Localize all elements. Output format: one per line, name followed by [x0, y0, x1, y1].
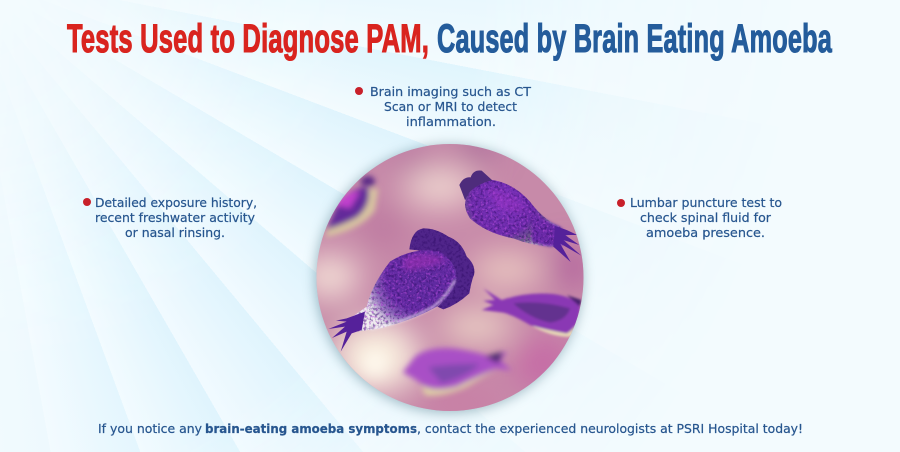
blurred amoeba right: [482, 288, 582, 337]
text block: lumbar puncture: check spinal fluid for: [640, 210, 772, 225]
circular amoeba image: [316, 144, 584, 411]
bullet: [83, 198, 91, 206]
text block: exposure history: or nasal rinsing.: [125, 225, 225, 240]
sharp amoeba centre: [328, 228, 474, 352]
text block: brain imaging: inflammation.: [406, 114, 496, 129]
title: Tests Used to Diagnose PAM,: [67, 17, 429, 61]
text block: brain imaging: Scan or MRI to detect: [384, 99, 517, 114]
sharp amoeba top right: [459, 170, 581, 262]
blurred amoeba bottom: [403, 348, 512, 395]
text block: lumbar puncture: Lumbar puncture test to: [630, 195, 782, 210]
text block: brain imaging: [355, 84, 531, 129]
bullet: [617, 199, 625, 207]
text block: brain imaging: Brain imaging such as CT: [370, 84, 531, 99]
bullet: [355, 87, 363, 95]
text block: exposure history: [83, 195, 257, 240]
text block: lumbar puncture: [617, 195, 782, 240]
closing call to action: , contact the experienced neurologists at PSRI Hospital today!: [417, 421, 803, 436]
text block: exposure history: Detailed exposure history,: [95, 195, 257, 210]
blurred amoeba top left: [325, 176, 378, 237]
text block: exposure history: recent freshwater activity: [95, 210, 255, 225]
circular shadow: [315, 145, 583, 413]
closing call to action: brain-eating amoeba symptoms: [205, 421, 417, 436]
closing call to action: If you notice any: [98, 421, 202, 436]
closing call to action: [98, 421, 803, 436]
blurred pink backdrop: [316, 144, 584, 411]
text block: lumbar puncture: amoeba presence.: [646, 225, 765, 240]
